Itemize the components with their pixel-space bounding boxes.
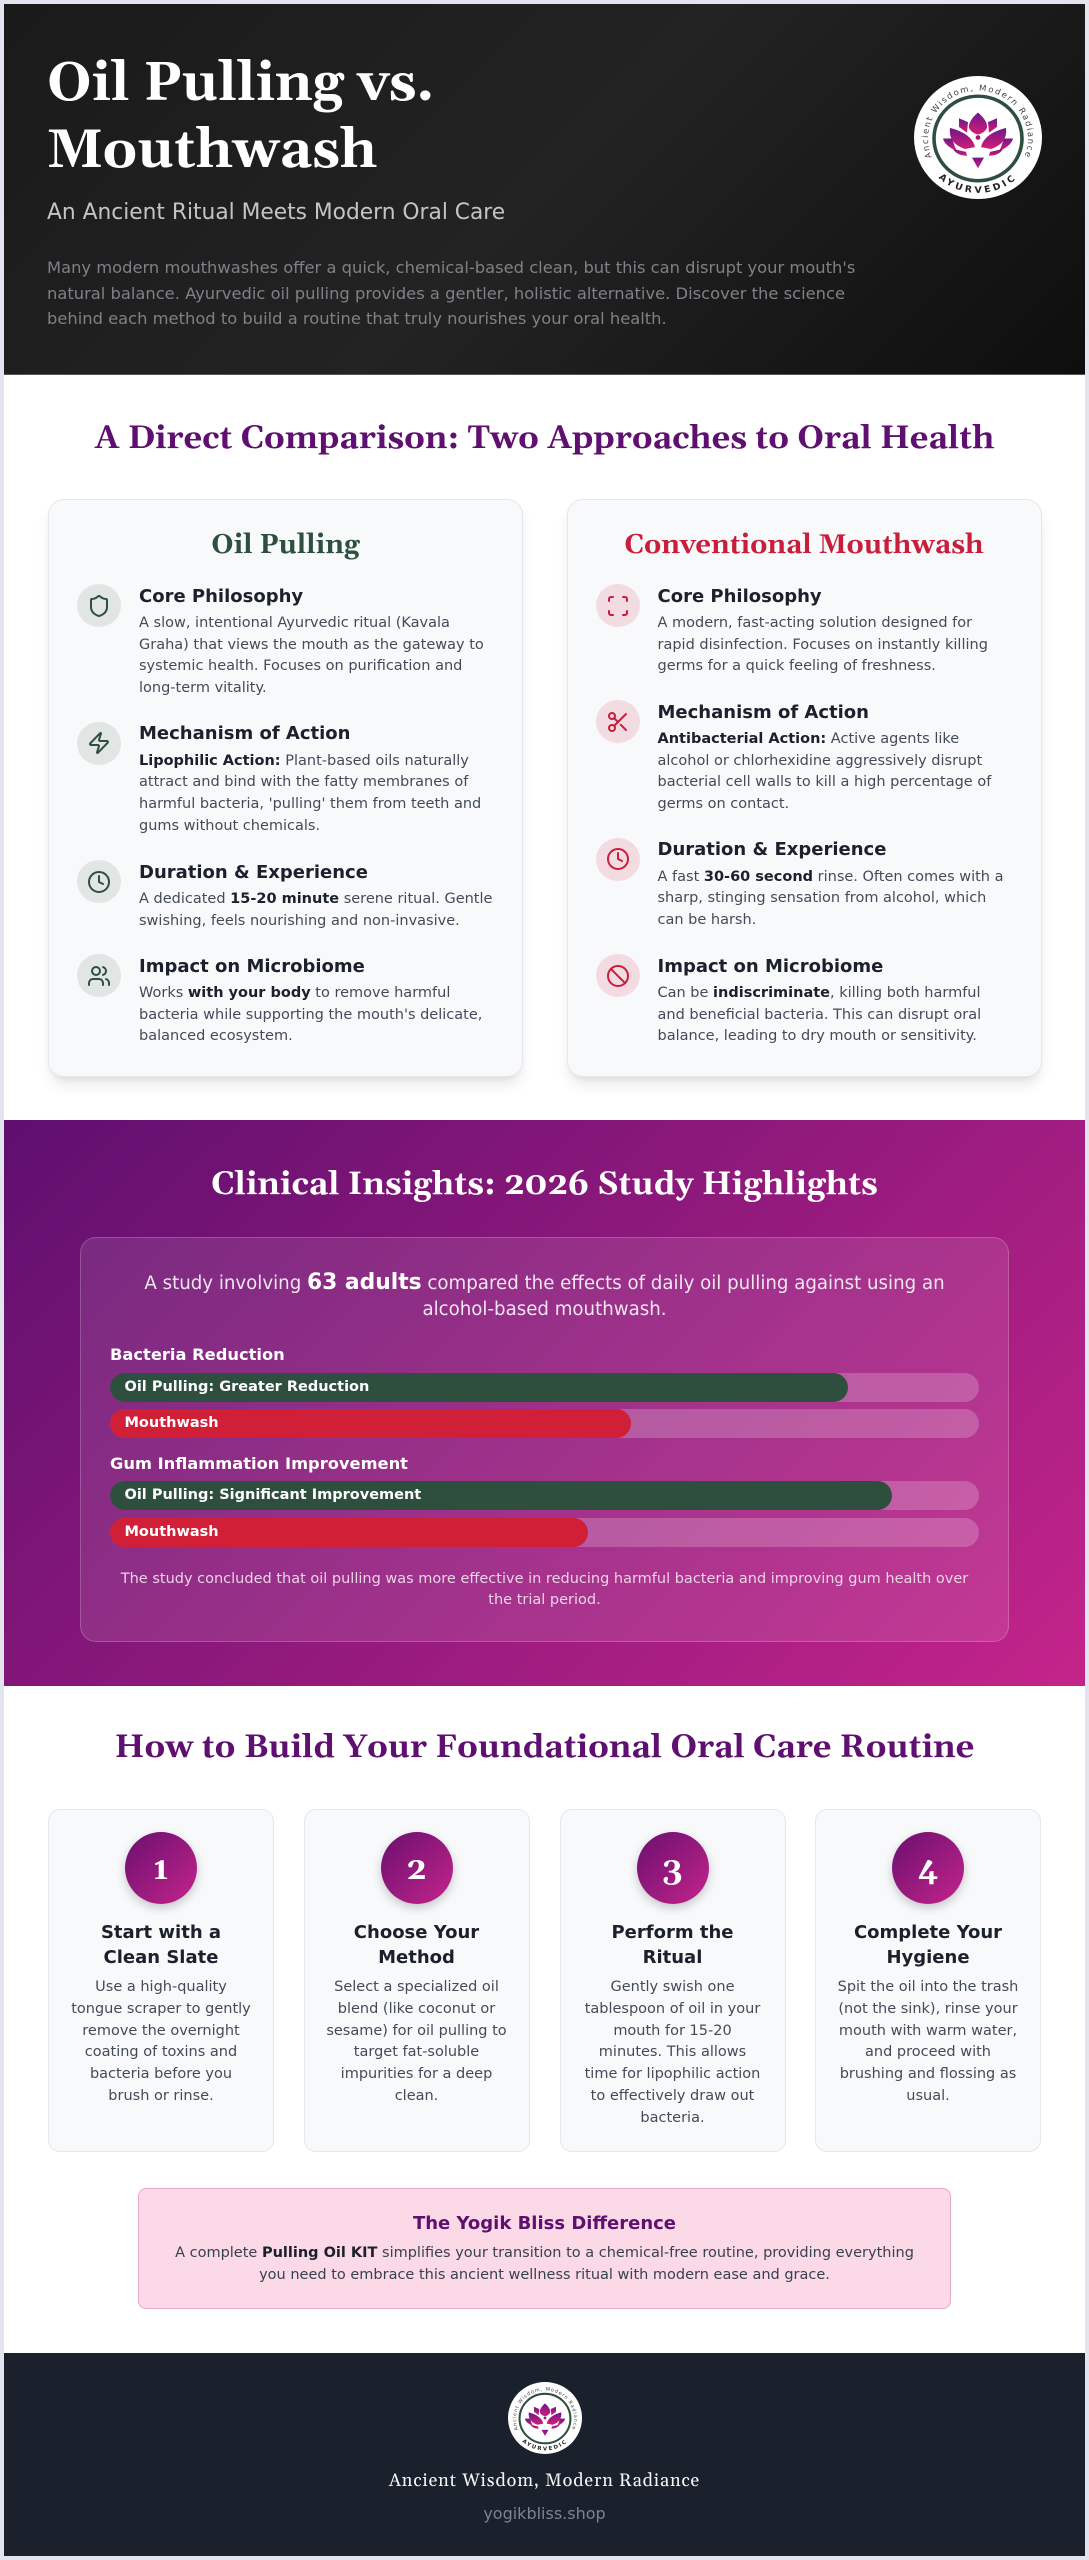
logo: Ayurvedic lotus seal: Ancient Wisdom, Modern Radiance: [922, 84, 1034, 158]
intro paragraph: behind each method to build a routine that truly nourishes your oral health.: [47, 309, 667, 328]
item: duration and experience: [596, 838, 1004, 928]
item: mechanism of action: alcohol or chlorhexidine aggressively disrupt: [658, 753, 982, 769]
step 2 text: [326, 1979, 507, 2104]
step 3 text: tablespoon of oil in your: [585, 2001, 760, 2017]
item: duration and experience: [77, 860, 492, 929]
step 2 text: blend (like coconut or: [338, 2001, 495, 2017]
callout text: you need to embrace this ancient wellness ritual with modern ease and grace.: [259, 2267, 830, 2283]
icon: scan: [596, 584, 640, 627]
item: duration and experience: sharp, stinging sensation from alcohol, which: [658, 890, 986, 906]
bar: oil pulling, bacteria: Oil Pulling: Greater Reduction: [124, 1378, 369, 1394]
callout text: A complete Pulling Oil KIT simplifies your transition to a chemical-free routine, providing everything: [175, 2245, 914, 2261]
callout: yogik bliss difference: [138, 2188, 951, 2309]
study intro text: [144, 1270, 945, 1320]
step number 3: 3: [662, 1849, 682, 1890]
step 3 text: minutes. This allows: [599, 2044, 746, 2060]
step 1 card: [48, 1809, 274, 2152]
icon: users: [77, 954, 121, 997]
step 2 text: Select a specialized oil: [334, 1979, 499, 1995]
step 4 title: Hygiene: [886, 1947, 970, 1968]
bar: mouthwash, bacteria: Mouthwash: [124, 1415, 219, 1431]
item: impact on microbiome: Can be indiscriminate, killing both harmful: [658, 985, 981, 1001]
comparison section: [4, 375, 1085, 1120]
step 1 text: bacteria before you: [90, 2066, 232, 2082]
callout title: The Yogik Bliss Difference: [413, 2213, 676, 2234]
item: mechanism of action: Mechanism of Action: [139, 723, 350, 744]
footer website: yogikbliss.shop: [483, 2504, 606, 2523]
bar: oil pulling, gums: [110, 1481, 978, 1510]
bar: mouthwash, gums: Mouthwash: [124, 1524, 219, 1540]
item: core philosophy: Graha) that views the mouth as the gateway to: [139, 637, 484, 653]
step 3 title: [611, 1922, 734, 1968]
item: mechanism of action: [77, 722, 481, 834]
item: duration and experience: Duration & Experience: [139, 862, 368, 882]
title: Oil Pulling vs.: [47, 50, 434, 119]
item: duration and experience: A fast 30-60 second rinse. Often comes with a: [658, 869, 1004, 885]
intro paragraph: Many modern mouthwashes offer a quick, chemical-based clean, but this can disrupt your mouth's: [47, 258, 855, 277]
subtitle: An Ancient Ritual Meets Modern Oral Care: [47, 200, 505, 225]
item: mechanism of action: attract and bind with the fatty membranes of: [139, 774, 468, 790]
item: core philosophy: systemic health. Focuses on purification and: [139, 658, 462, 674]
step 4 text: (not the sink), rinse your: [838, 2001, 1018, 2017]
step 4 card: [815, 1809, 1041, 2152]
step number 1: [125, 1832, 197, 1904]
item: core philosophy: long-term vitality.: [139, 680, 267, 696]
step 3 text: bacteria.: [640, 2110, 705, 2126]
logo: Ayurvedic lotus seal: [914, 76, 1042, 199]
step 2 title: [354, 1922, 480, 1968]
item: core philosophy: A slow, intentional Ayurvedic ritual (Kavala: [139, 615, 450, 631]
intro paragraph: [47, 258, 855, 328]
item: mechanism of action: [596, 700, 992, 812]
step 2 title: Method: [378, 1947, 455, 1968]
step 4 text: usual.: [906, 2088, 950, 2104]
icon: ban: [596, 954, 640, 997]
item: mechanism of action: harmful bacteria, 'pulling' them from teeth and: [139, 796, 481, 812]
item: mechanism of action: Mechanism of Action: [658, 702, 869, 722]
study conclusion: The study concluded that oil pulling was more effective in reducing harmful bacteria and improving gum health over: [121, 1570, 968, 1586]
chart label: bacteria reduction: Bacteria Reduction: [110, 1345, 285, 1364]
footer logo: Ancient Wisdom, Modern Radiance: [512, 2387, 578, 2430]
item: impact on microbiome: balance, leading to dry mouth or sensitivity.: [658, 1028, 977, 1044]
item: core philosophy: Core Philosophy: [139, 586, 303, 606]
step 3 text: time for lipophilic action: [585, 2066, 760, 2082]
step 3 text: Gently swish one: [610, 1979, 735, 1995]
item: mechanism of action: Antibacterial Action: Active agents like: [658, 731, 959, 747]
step number 4: [892, 1832, 964, 1904]
step 2 text: impurities for a deep: [341, 2066, 492, 2082]
callout text: [175, 2245, 914, 2283]
item: impact on microbiome: balanced ecosystem.: [139, 1028, 293, 1044]
study conclusion: [120, 1570, 968, 1608]
item: impact on microbiome: [596, 954, 981, 1044]
step 4 text: mouth with warm water,: [839, 2023, 1017, 2039]
item: core philosophy: A modern, fast-acting solution designed for: [658, 615, 972, 631]
step 1 text: [71, 1979, 251, 2104]
bar: oil pulling, gums: Oil Pulling: Significant Improvement: [124, 1487, 421, 1503]
footer tagline: Ancient Wisdom, Modern Radiance: [389, 2470, 700, 2493]
footer logo: [508, 2382, 582, 2454]
icon: clock: [77, 860, 121, 903]
step 2 title: Choose Your: [354, 1922, 479, 1943]
step 3 card: [560, 1809, 786, 2152]
step 1 text: brush or rinse.: [108, 2088, 214, 2104]
item: impact on microbiome: Works with your body to remove harmful: [139, 985, 450, 1001]
item: mechanism of action: bacterial cell walls to kill a high percentage of: [658, 774, 991, 790]
step 3 title: Ritual: [643, 1947, 702, 1968]
step 1 text: tongue scraper to gently: [71, 2001, 251, 2017]
heading: routine: How to Build Your Foundational Oral Care Routine: [115, 1728, 974, 1769]
item: core philosophy: Core Philosophy: [658, 586, 822, 606]
icon: lightning bolt: [77, 722, 121, 765]
step number 1: 1: [153, 1849, 169, 1890]
panel: study card: [80, 1237, 1009, 1642]
step 1 text: remove the overnight: [82, 2023, 240, 2039]
bar: mouthwash, bacteria: [110, 1409, 978, 1438]
step 4 title: [854, 1922, 1002, 1968]
item: mechanism of action: gums without chemicals.: [139, 818, 320, 834]
heading: clinical insights: Clinical Insights: 2026 Study Highlights: [211, 1165, 878, 1206]
step 1 text: Use a high-quality: [95, 1979, 227, 1995]
chart label: gum inflammation: Gum Inflammation Improvement: [110, 1454, 408, 1473]
item: core philosophy: [596, 584, 988, 674]
step 1 text: coating of toxins and: [85, 2044, 237, 2060]
step 2 text: clean.: [395, 2088, 438, 2104]
footer logo: AYURVEDIC: [522, 2440, 566, 2450]
item: mechanism of action: Lipophilic Action: Plant-based oils naturally: [139, 753, 469, 769]
heading: oil pulling: Oil Pulling: [211, 529, 360, 563]
item: duration and experience: swishing, feels nourishing and non-invasive.: [139, 913, 460, 929]
icon: scissors: [596, 700, 640, 743]
step 4 text: [838, 1979, 1018, 2104]
item: duration and experience: A dedicated 15-20 minute serene ritual. Gentle: [139, 891, 492, 907]
icon: shield: [77, 584, 121, 627]
step number 4: 4: [918, 1849, 938, 1890]
step 2 text: target fat-soluble: [354, 2044, 479, 2060]
routine section background: [4, 1686, 1085, 2353]
step 1 title: [101, 1922, 221, 1968]
item: duration and experience: Duration & Experience: [658, 839, 886, 860]
bar: oil pulling, bacteria: [110, 1372, 978, 1402]
title: [47, 50, 434, 186]
heading: conventional mouthwash: Conventional Mouthwash: [624, 529, 984, 563]
step 1 title: Clean Slate: [104, 1947, 218, 1968]
bar: mouthwash, gums: [110, 1518, 978, 1547]
study intro text: alcohol-based mouthwash.: [422, 1299, 667, 1320]
item: core philosophy: germs for a quick feeling of freshness.: [658, 658, 936, 674]
step 4 title: Complete Your: [854, 1922, 1002, 1943]
icon: clock: [596, 838, 640, 881]
item: core philosophy: [77, 584, 484, 696]
item: impact on microbiome: Impact on Microbiome: [658, 956, 883, 976]
step number 2: 2: [406, 1849, 427, 1890]
item: mechanism of action: germs on contact.: [658, 796, 789, 812]
intro paragraph: natural balance. Ayurvedic oil pulling provides a gentler, holistic alternative. Discover the science: [47, 284, 845, 303]
step 1 title: Start with a: [101, 1922, 221, 1943]
item: impact on microbiome: [77, 954, 482, 1044]
panel: conventional mouthwash: [566, 499, 1042, 1077]
item: duration and experience: can be harsh.: [658, 912, 756, 928]
step 3 text: mouth for 15-20: [613, 2023, 732, 2039]
step 4 text: brushing and flossing as: [840, 2066, 1016, 2082]
item: impact on microbiome: and beneficial bacteria. This can disrupt oral: [658, 1007, 981, 1023]
panel: clinical insights background: [4, 1120, 1085, 1686]
title: Mouthwash: [47, 117, 377, 186]
study intro text: A study involving 63 adults compared the effects of daily oil pulling against using an: [144, 1270, 945, 1295]
step 2 text: sesame) for oil pulling to: [326, 2023, 507, 2039]
panel: oil pulling: [48, 499, 523, 1077]
step 4 text: and proceed with: [865, 2044, 991, 2060]
heading: comparison: A Direct Comparison: Two Approaches to Oral Health: [95, 419, 994, 460]
step number 2: [380, 1832, 452, 1904]
step 4 text: Spit the oil into the trash: [838, 1979, 1018, 1995]
study conclusion: the trial period.: [488, 1592, 601, 1608]
item: impact on microbiome: bacteria while supporting the mouth's delicate,: [139, 1007, 482, 1023]
step 3 title: Perform the: [611, 1922, 734, 1943]
step number 3: [636, 1832, 708, 1904]
item: impact on microbiome: Impact on Microbiome: [139, 956, 365, 976]
step 3 text: to effectively draw out: [591, 2088, 754, 2104]
item: core philosophy: rapid disinfection. Focuses on instantly killing: [658, 637, 988, 653]
step 3 text: [585, 1979, 760, 2126]
step 2 card: [304, 1809, 530, 2152]
footer: [4, 2353, 1085, 2556]
logo: Ayurvedic lotus seal: AYURVEDIC: [938, 174, 1015, 193]
header panel: [4, 4, 1085, 375]
